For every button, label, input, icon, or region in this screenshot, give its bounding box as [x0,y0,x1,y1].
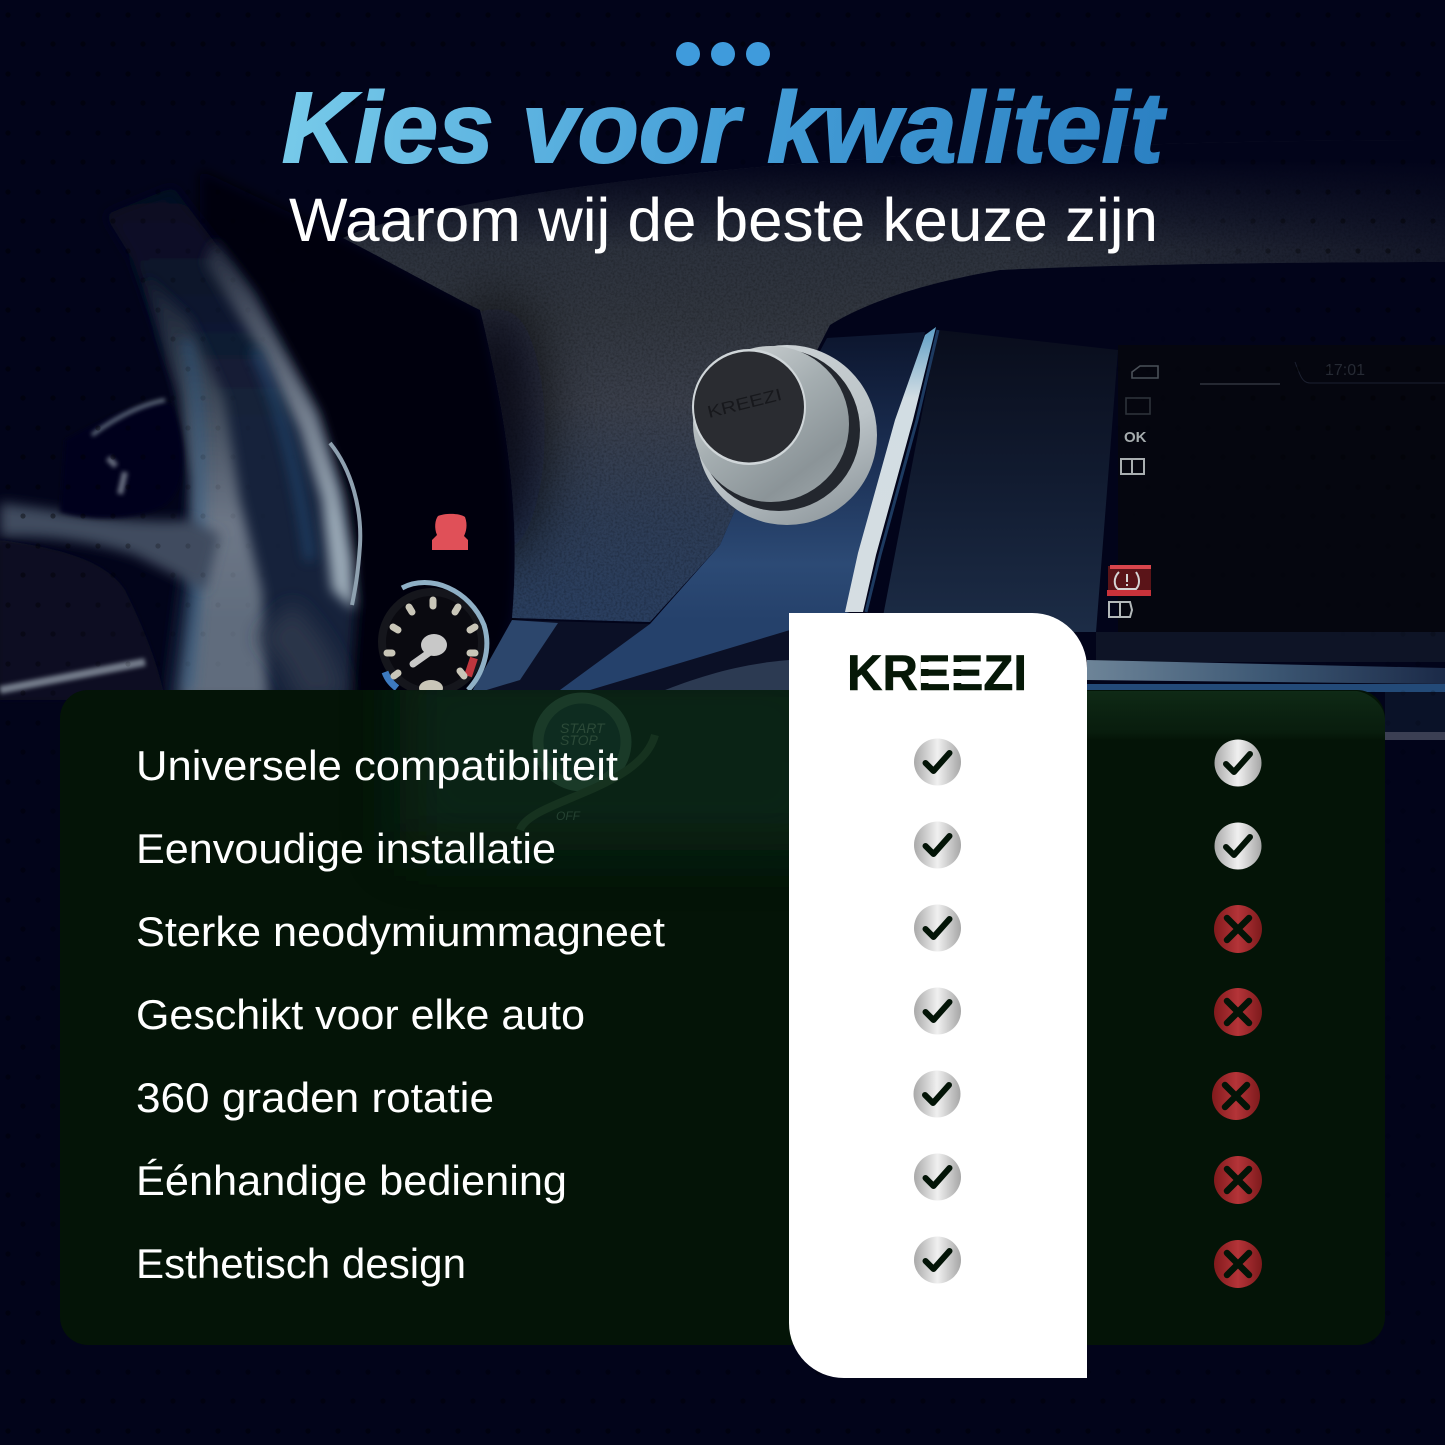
steering wheel [0,187,360,700]
panel: comparison table background [60,660,1385,1345]
feature labels: Universele compatibiliteit [136,742,618,789]
screen icons [1107,366,1158,617]
title: Kies voor kwaliteit [282,72,1167,184]
start stop button seen through panel [520,698,655,830]
dark hood around instruments [200,170,515,700]
logo: Kreezi: KREEZI [847,645,1027,701]
feature labels: Esthetisch design [136,1240,466,1287]
round gauge [382,583,487,696]
competitor column icons [1212,740,1262,1288]
dots decoration [676,42,770,66]
start stop button seen through panel: OFF [556,809,581,823]
infotainment screen [1118,345,1445,635]
product: magnetic mount: KREEZI [705,385,784,422]
chrome trim strip [845,327,936,612]
background: car dashboard photo: OK [1124,429,1147,446]
side gauge on the left [60,403,183,518]
start stop button seen through panel: START [560,720,606,736]
feature labels [136,742,665,1287]
feature labels: Geschikt voor elke auto [136,991,585,1038]
feature labels: 360 graden rotatie [136,1074,494,1121]
background: car dashboard photo: 17:01 [1325,362,1365,379]
panel: white Kreezi column [789,613,1087,1378]
band below leather [480,600,789,700]
icon: Kreezi checks [914,738,961,1284]
start stop button seen through panel: STOP [560,732,599,748]
feature labels: Eenvoudige installatie [136,825,556,872]
centre vent panel [880,330,1118,632]
feature labels: Sterke neodymiummagneet [136,908,665,955]
feature labels: Éénhandige bediening [136,1157,567,1204]
subtitle: Waarom wij de beste keuze zijn [289,186,1158,254]
dashboard leather top [330,140,1445,640]
blue panel under leather [560,332,925,690]
lower trim strips [660,660,789,692]
red warning lamp [432,514,468,550]
product: magnetic mount [692,345,877,525]
